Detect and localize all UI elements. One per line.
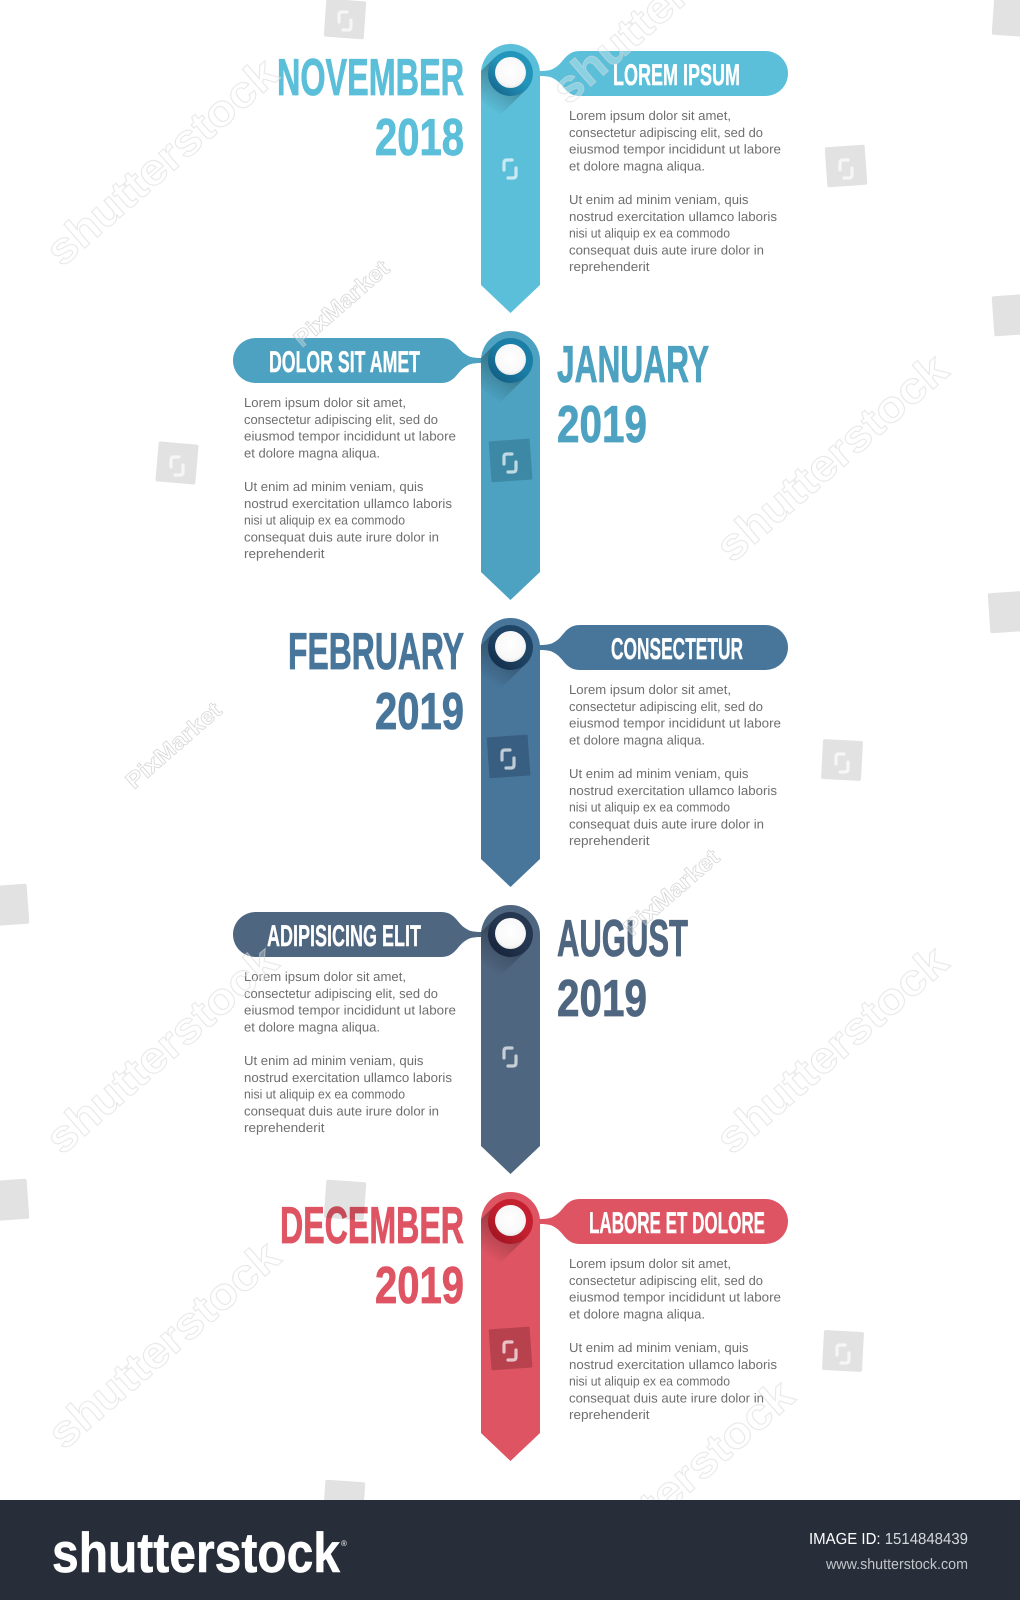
pin centre xyxy=(495,918,526,949)
banner connector xyxy=(233,338,496,383)
pin ring xyxy=(488,625,533,670)
timeline section: December 2019 xyxy=(280,1192,788,1461)
banner connector xyxy=(525,51,788,96)
body text: consequat duis aute irure dolor in xyxy=(244,1103,439,1118)
timeline section: February 2019 xyxy=(288,618,788,887)
pin ring xyxy=(488,1199,533,1244)
timeline section: November 2018 xyxy=(277,44,788,313)
body text: consectetur adipiscing elit, sed do xyxy=(244,412,438,427)
pin ring xyxy=(488,912,533,957)
pin shadow xyxy=(481,632,526,691)
year title: 2018 xyxy=(375,109,464,167)
body text: reprehenderit xyxy=(244,546,325,561)
body text: nisi ut aliquip ex ea commodo xyxy=(569,800,730,815)
body text: et dolore magna aliqua. xyxy=(569,732,705,747)
image id: IMAGE ID: 1514848439 xyxy=(809,1531,968,1548)
watermarks: shutterstock xyxy=(36,936,288,1164)
arrow column xyxy=(481,44,540,313)
body text: consectetur adipiscing elit, sed do xyxy=(569,1273,763,1288)
pin ring xyxy=(488,338,533,383)
body text: nostrud exercitation ullamco laboris xyxy=(569,1357,777,1372)
watermarks: shutterstock xyxy=(706,344,958,572)
year title: 2019 xyxy=(375,683,464,741)
pin shadow xyxy=(481,345,526,404)
arrow column xyxy=(481,618,540,887)
body text: nisi ut aliquip ex ea commodo xyxy=(244,1087,405,1102)
arrow column xyxy=(481,1192,540,1461)
banner connector xyxy=(233,912,496,957)
registered mark: ® xyxy=(341,1539,347,1548)
body text: consequat duis aute irure dolor in xyxy=(569,816,764,831)
body text: Ut enim ad minim veniam, quis xyxy=(569,192,749,207)
body text: nostrud exercitation ullamco laboris xyxy=(244,496,452,511)
body text xyxy=(244,395,456,561)
banner connector xyxy=(525,1199,788,1244)
body text: reprehenderit xyxy=(569,1407,650,1422)
body text xyxy=(569,108,781,274)
timeline section: January 2019 xyxy=(233,331,709,600)
body text: Lorem ipsum dolor sit amet, xyxy=(569,1256,731,1271)
site url: www.shutterstock.com xyxy=(825,1556,968,1573)
body text: et dolore magna aliqua. xyxy=(244,1019,380,1034)
body text: consequat duis aute irure dolor in xyxy=(569,1390,764,1405)
pin shadow xyxy=(481,58,526,117)
body text: Ut enim ad minim veniam, quis xyxy=(244,479,424,494)
arrow column xyxy=(481,331,540,600)
footer bar xyxy=(0,1500,1020,1600)
body text: consectetur adipiscing elit, sed do xyxy=(244,986,438,1001)
body text: consectetur adipiscing elit, sed do xyxy=(569,699,763,714)
body text: et dolore magna aliqua. xyxy=(569,1306,705,1321)
timeline section: August 2019 xyxy=(233,905,688,1174)
body text: nisi ut aliquip ex ea commodo xyxy=(244,513,405,528)
watermarks: PixMarket xyxy=(120,696,227,794)
month title: AUGUST xyxy=(557,910,688,968)
body text: eiusmod tempor incididunt ut labore xyxy=(244,429,456,444)
month title: JANUARY xyxy=(557,336,709,394)
banner label: DOLOR SIT AMET xyxy=(269,346,420,379)
banner label: LOREM IPSUM xyxy=(613,59,740,92)
body text: Lorem ipsum dolor sit amet, xyxy=(569,682,731,697)
body text: eiusmod tempor incididunt ut labore xyxy=(569,716,781,731)
watermarks: shutterstock xyxy=(552,1370,804,1598)
body text: reprehenderit xyxy=(569,833,650,848)
arrow column xyxy=(481,905,540,1174)
watermark icons xyxy=(171,12,852,1363)
body text: Lorem ipsum dolor sit amet, xyxy=(569,108,731,123)
body text: reprehenderit xyxy=(244,1120,325,1135)
body text: Ut enim ad minim veniam, quis xyxy=(244,1053,424,1068)
watermarks: PixMarket xyxy=(618,843,725,941)
body text: reprehenderit xyxy=(569,259,650,274)
year title: 2019 xyxy=(557,970,647,1028)
year title: 2019 xyxy=(557,396,647,454)
body text: Lorem ipsum dolor sit amet, xyxy=(244,395,406,410)
body text: Ut enim ad minim veniam, quis xyxy=(569,766,749,781)
pin centre xyxy=(495,344,526,375)
pin centre xyxy=(495,631,526,662)
pin centre xyxy=(495,1205,526,1236)
pin ring xyxy=(488,51,533,96)
body text: consequat duis aute irure dolor in xyxy=(244,529,439,544)
body text: nisi ut aliquip ex ea commodo xyxy=(569,226,730,241)
body text: nostrud exercitation ullamco laboris xyxy=(569,783,777,798)
watermarks: shutterstock xyxy=(38,1231,290,1459)
banner label: CONSECTETUR xyxy=(611,633,743,666)
pin centre xyxy=(495,57,526,88)
body text: Ut enim ad minim veniam, quis xyxy=(569,1340,749,1355)
month title: NOVEMBER xyxy=(277,49,464,107)
month title: DECEMBER xyxy=(280,1197,464,1255)
watermarks: shutterstock xyxy=(706,936,958,1164)
footer logo: shutterstock xyxy=(52,1521,341,1584)
body text: et dolore magna aliqua. xyxy=(244,445,380,460)
pin shadow xyxy=(481,919,526,978)
body text: Lorem ipsum dolor sit amet, xyxy=(244,969,406,984)
body text: nostrud exercitation ullamco laboris xyxy=(244,1070,452,1085)
pin shadow xyxy=(481,1206,526,1265)
body text: nisi ut aliquip ex ea commodo xyxy=(569,1374,730,1389)
body text: eiusmod tempor incididunt ut labore xyxy=(244,1003,456,1018)
body text xyxy=(244,969,456,1135)
banner label: LABORE ET DOLORE xyxy=(589,1207,765,1240)
body text: nostrud exercitation ullamco laboris xyxy=(569,209,777,224)
body text xyxy=(569,1256,781,1422)
month title: FEBRUARY xyxy=(288,623,464,681)
body text: consequat duis aute irure dolor in xyxy=(569,242,764,257)
body text: consectetur adipiscing elit, sed do xyxy=(569,125,763,140)
year title: 2019 xyxy=(375,1257,464,1315)
watermarks: shutterstock xyxy=(36,48,288,276)
watermarks: PixMarket xyxy=(288,254,395,352)
body text: eiusmod tempor incididunt ut labore xyxy=(569,1290,781,1305)
body text: eiusmod tempor incididunt ut labore xyxy=(569,142,781,157)
body text: et dolore magna aliqua. xyxy=(569,158,705,173)
body text xyxy=(569,682,781,848)
banner label: ADIPISICING ELIT xyxy=(267,920,421,953)
banner connector xyxy=(525,625,788,670)
